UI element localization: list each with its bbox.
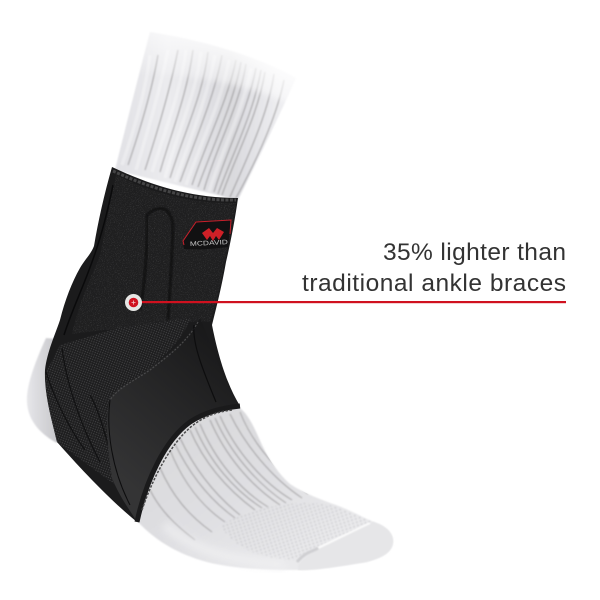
brace: upper strap panel [72, 175, 236, 334]
brace: side panel stitching [109, 322, 216, 505]
brace: smooth side panel [107, 318, 240, 522]
sock: foot [138, 408, 393, 570]
callout marker [125, 294, 142, 311]
brace: strap seams [64, 171, 236, 335]
brace: mesh panel [46, 318, 190, 490]
callout line [134, 301, 566, 303]
logo: red M mark [202, 228, 224, 241]
brace: bottom strap binding [137, 406, 240, 522]
sock: ball of foot knit texture [220, 503, 372, 560]
ankle brace: black body [45, 167, 240, 522]
logo: McDavid badge [183, 220, 231, 249]
callout text [302, 239, 566, 297]
sock: upper leg [115, 33, 286, 200]
logo: wordmark: MCDAVID [190, 239, 228, 248]
sock: toe cap [298, 522, 393, 570]
callout text: traditional ankle braces [302, 270, 566, 297]
callout text: 35% lighter than [383, 239, 566, 266]
sock: heel [27, 338, 70, 443]
